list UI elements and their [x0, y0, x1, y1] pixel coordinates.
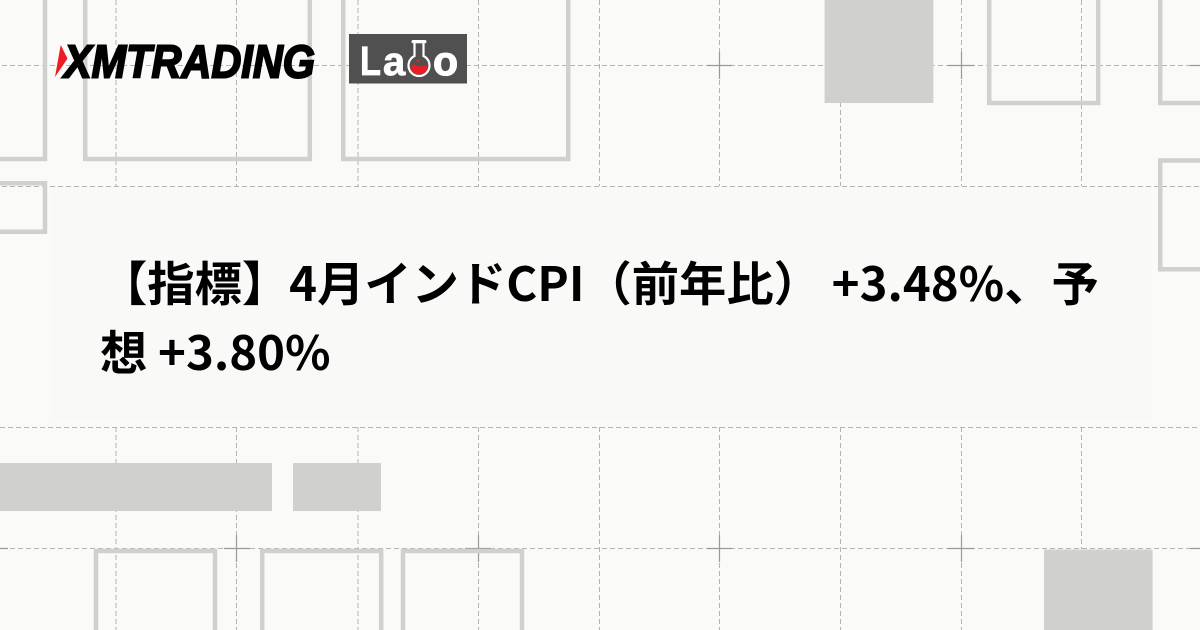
wordmark L: L	[360, 38, 381, 84]
logo: Labo	[349, 34, 467, 84]
title: 【指標】4月インドCPI（前年比） +3.48%、予想 +3.80%	[100, 246, 1099, 384]
logo: XMTRADING	[55, 36, 315, 86]
wordmark o: o	[433, 38, 458, 84]
icon: flask	[408, 40, 430, 76]
wordmark a: a	[383, 40, 406, 84]
panel: title backdrop	[52, 187, 1152, 420]
icon: red arrow	[55, 45, 68, 77]
